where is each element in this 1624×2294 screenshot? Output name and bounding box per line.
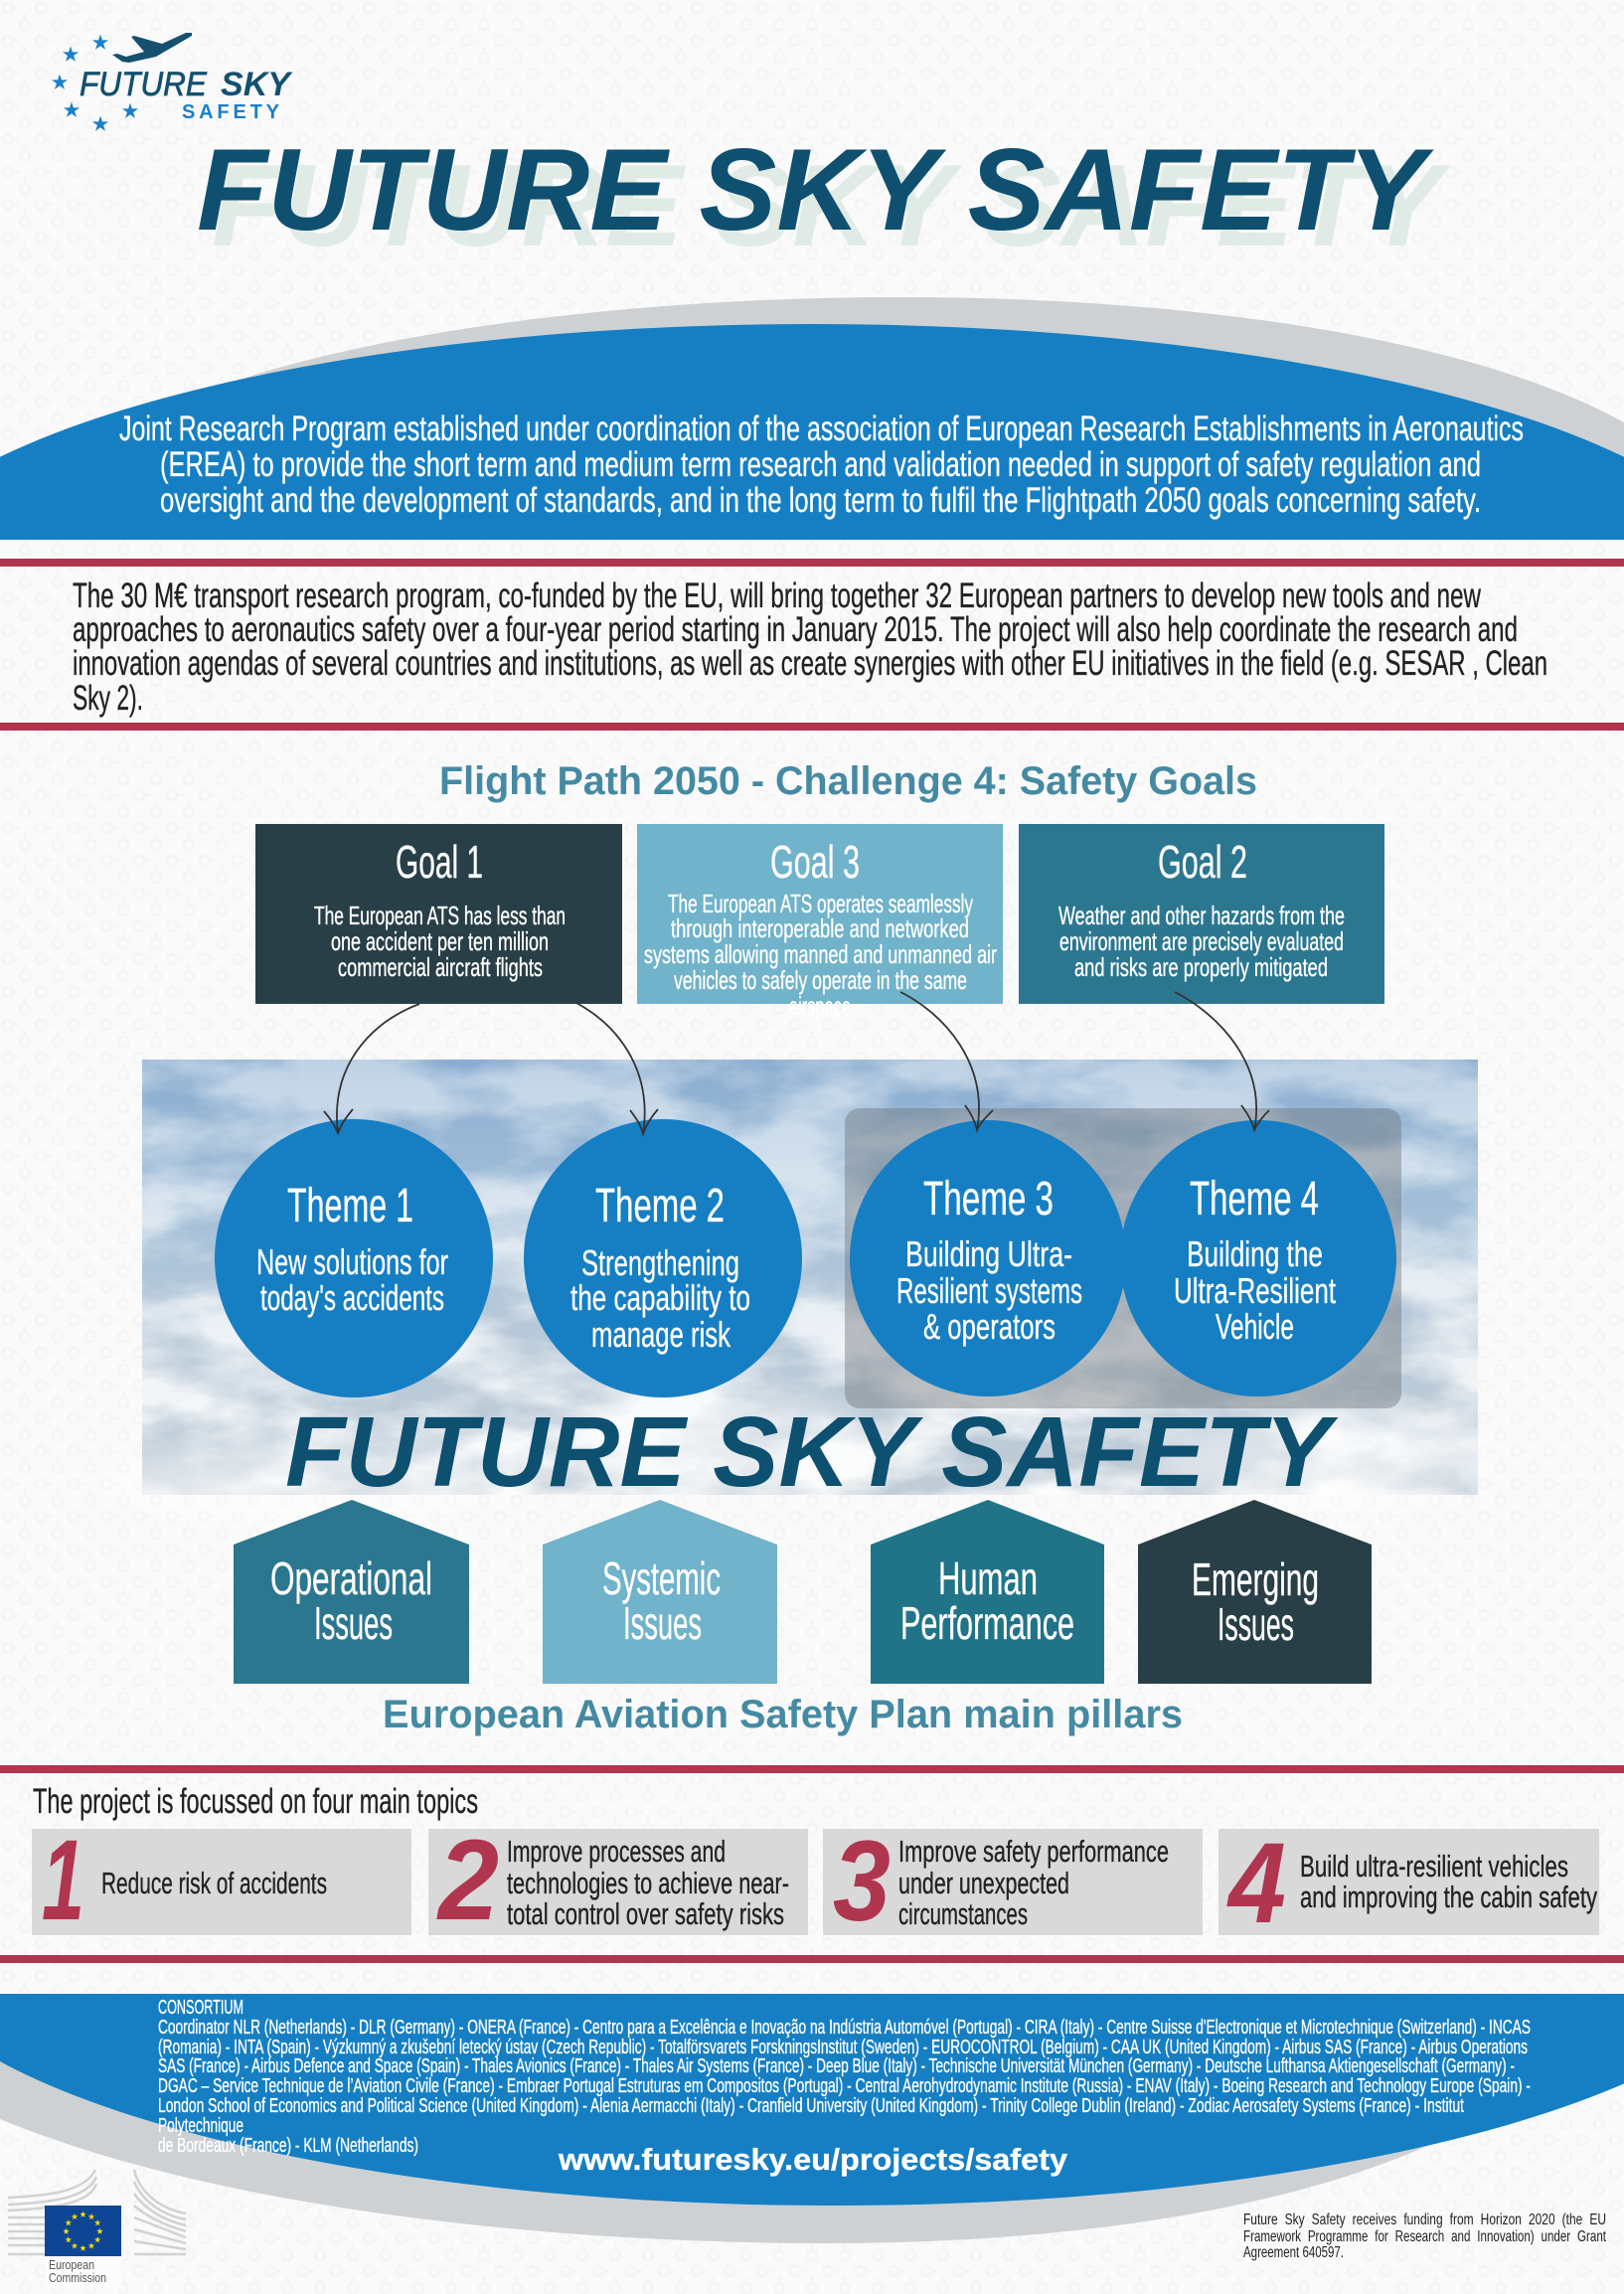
pillar: human performance: Performance	[900, 1597, 1074, 1649]
logo: European Commission	[8, 2170, 186, 2288]
theme 1: Theme 1	[287, 1180, 413, 1232]
theme 3: Resilient systems	[896, 1270, 1082, 1311]
logo wordmark bold: SKY	[221, 66, 293, 103]
panel: topic 2: 2	[436, 1817, 499, 1944]
panel: topic 2: technologies to achieve near-	[507, 1866, 789, 1900]
panel: topic 2	[428, 1817, 808, 1944]
title: FUTURE SKY SAFETY	[197, 124, 1434, 254]
panel: topic 3: circumstances	[898, 1896, 1028, 1931]
theme 4	[1120, 1120, 1396, 1396]
consortium text	[158, 1997, 1531, 2157]
pillar: human performance	[871, 1500, 1104, 1684]
pillar: operational issues: Operational	[270, 1553, 432, 1604]
panel: goal 3	[637, 824, 1003, 1021]
theme 2: the capability to	[570, 1277, 750, 1318]
icon: Berlaymont building	[8, 2170, 186, 2254]
arrow: goal 2 to theme 4	[1175, 992, 1269, 1130]
theme 3: Building Ultra-	[905, 1233, 1072, 1274]
theme 3: & operators	[923, 1306, 1056, 1347]
theme 4: Ultra-Resilient	[1174, 1270, 1336, 1311]
logo caption: Commission	[49, 2270, 106, 2285]
pillar: operational issues: Issues	[314, 1597, 393, 1649]
panel: sky background with themes	[99, 1060, 1491, 1521]
panel: goal 3: through interoperable and networked	[671, 913, 969, 943]
panel: goal 1: The European ATS has less than	[314, 901, 566, 930]
logo tagline: SAFETY	[182, 101, 280, 123]
theme 2: Theme 2	[595, 1180, 725, 1232]
heading: main pillars: European Aviation Safety Plan main pillars	[383, 1693, 1183, 1736]
panel: goal 2: and risks are properly mitigated	[1074, 952, 1328, 982]
arrow: goal 1 to theme 1	[324, 1004, 419, 1133]
consortium text: CONSORTIUM	[158, 1997, 244, 2019]
pillar: human performance: Human	[938, 1553, 1038, 1604]
consortium text: de Bordeaux (France) - KLM (Netherlands)	[158, 2135, 418, 2157]
arrow: goal 1 to theme 2	[574, 1002, 658, 1134]
panel: topic 2: total control over safety risks	[507, 1896, 784, 1931]
title: FUTURE SKY SAFETY	[212, 140, 1451, 270]
pillar: emerging issues: Issues	[1218, 1598, 1294, 1650]
panel: goal 1: commercial aircraft flights	[338, 952, 543, 982]
logo caption: European	[49, 2257, 94, 2272]
pillar: systemic issues	[543, 1500, 777, 1684]
heading: four main topics: The project is focussed on four main topics	[33, 1782, 478, 1821]
panel: topic 3: Improve safety performance	[898, 1834, 1169, 1869]
panel: goal 3: The European ATS operates seamlessly	[668, 889, 973, 918]
panel: topic 4	[1218, 1820, 1599, 1947]
website link: www.futuresky.eu/projects/safety	[558, 2142, 1068, 2177]
panel: goal 3: vehicles to safely operate in the same	[674, 965, 967, 995]
funding notice: Agreement 640597.	[1243, 2244, 1344, 2261]
icon: EU flag	[45, 2206, 121, 2256]
panel: goal 3: Goal 3	[770, 836, 860, 888]
panel: intro dome	[0, 297, 1624, 540]
panel: goal 2: Goal 2	[1158, 836, 1247, 888]
panel: topic 4: 4	[1226, 1820, 1286, 1947]
pillar: systemic issues: Issues	[623, 1597, 702, 1649]
panel: goal 3: systems allowing manned and unmanned air	[644, 939, 997, 969]
text block: programme description: Sky 2).	[73, 679, 143, 718]
theme 2: manage risk	[591, 1314, 731, 1355]
theme 3: Theme 3	[923, 1173, 1054, 1226]
pillar: systemic issues: Systemic	[602, 1553, 721, 1604]
theme 2: Strengthening	[581, 1242, 739, 1283]
funding notice	[1243, 2212, 1606, 2261]
theme 1: today's accidents	[260, 1277, 444, 1318]
logo wordmark: FUTURE	[80, 66, 207, 103]
panel: topic 1: Reduce risk of accidents	[101, 1866, 327, 1900]
panel: topic 2: Improve processes and	[507, 1834, 726, 1869]
icon: aeroplane	[112, 33, 192, 63]
icon: ring of stars	[52, 34, 138, 131]
panel: consortium dome	[0, 1994, 1624, 2243]
panel: goal 3: airspace	[789, 991, 851, 1021]
pillar: operational issues	[234, 1500, 469, 1684]
panel: topic 3	[823, 1818, 1203, 1945]
panel: goal 1: one accident per ten million	[331, 926, 549, 956]
panel: topic 3: under unexpected	[898, 1866, 1069, 1900]
theme 1	[215, 1119, 493, 1397]
intro text	[119, 410, 1524, 520]
pillar: emerging issues	[1138, 1500, 1372, 1684]
text block: programme description	[73, 576, 1547, 718]
theme 1: New solutions for	[256, 1241, 448, 1282]
theme 2	[524, 1119, 802, 1397]
theme 3	[850, 1120, 1126, 1396]
logo caption	[49, 2257, 106, 2285]
panel: topic 1: 1	[42, 1817, 84, 1944]
panel: goal 2	[1019, 824, 1384, 1004]
theme 4: Vehicle	[1216, 1306, 1294, 1347]
panel: topic 1	[32, 1817, 411, 1944]
panel: goal 1: Goal 1	[396, 836, 483, 888]
pillar: emerging issues: Emerging	[1192, 1554, 1319, 1605]
panel: goal 1	[255, 824, 622, 1004]
theme 4: Theme 4	[1190, 1173, 1319, 1226]
heading: safety goals: Flight Path 2050 - Challenge 4: Safety Goals	[439, 759, 1257, 803]
consortium text: Polytechnique	[158, 2115, 244, 2137]
panel: goal 2: environment are precisely evaluated	[1059, 926, 1344, 956]
programme name over sky: FUTURE SKY SAFETY	[285, 1396, 1339, 1508]
panel: goal 2: Weather and other hazards from the	[1058, 901, 1345, 930]
panel: topic 3: 3	[833, 1818, 891, 1945]
arrow: goal 3 to theme 3	[900, 992, 993, 1130]
theme 4: Building the	[1187, 1233, 1323, 1274]
logo: Future Sky Safety	[52, 33, 293, 131]
